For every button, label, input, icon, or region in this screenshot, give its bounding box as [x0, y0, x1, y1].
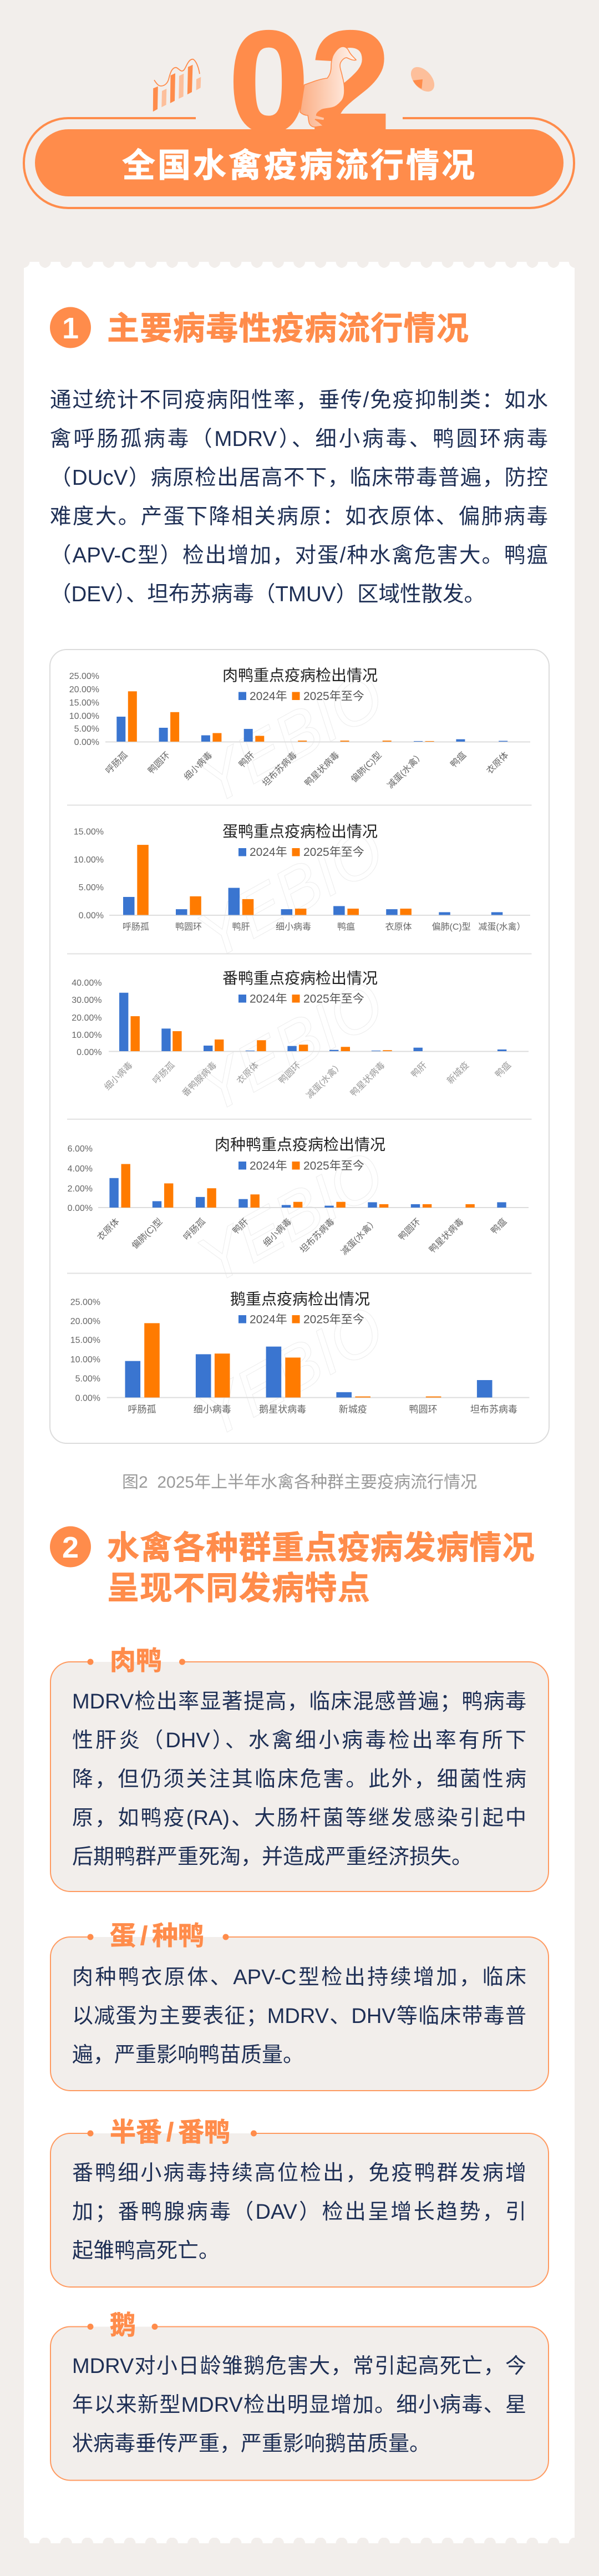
- y axis labels: 25.00%: [69, 672, 99, 681]
- x axis labels: 鸭肝: [231, 1216, 251, 1236]
- x axis labels: 呼肠孤: [128, 1404, 156, 1414]
- text block: section 1 body: （DEV）、坦布苏病毒（TMUV）区域性散发。: [50, 582, 485, 606]
- text block: meat duck: 性肝炎（DHV）、水禽细小病毒检出率有所下: [72, 1729, 526, 1752]
- text block: goose: MDRV对小日龄雏鹅危害大，常引起高死亡，今: [72, 2355, 526, 2378]
- x axis labels: 鸭圆环: [146, 750, 172, 776]
- legend: [238, 690, 364, 703]
- x axis labels: 衣原体: [485, 750, 511, 776]
- card frame: semi-muscovy and muscovy duck: [50, 2130, 549, 2287]
- y axis labels: 15.00%: [74, 828, 104, 836]
- legend: 2024年: [250, 993, 287, 1005]
- x axis labels: 鸭圆环: [277, 1060, 303, 1086]
- y axis labels: [72, 978, 102, 1057]
- x axis labels: 呼肠孤: [104, 750, 130, 776]
- y axis labels: 4.00%: [68, 1164, 93, 1174]
- x axis labels: 减蛋(水禽）: [339, 1216, 379, 1257]
- card frame: layer and breeder duck: [50, 1934, 549, 2091]
- y axis labels: 0.00%: [75, 1393, 100, 1403]
- y axis labels: 10.00%: [72, 1031, 102, 1040]
- x axis labels: 偏肺(C)型: [432, 922, 471, 932]
- chart: layer duck: [74, 813, 530, 973]
- section badge 2: [50, 1527, 91, 1568]
- text block: layer and breeder duck: 肉种鸭衣原体、APV-C型检出持续增加，临床: [72, 1966, 526, 1989]
- x axis labels: 呼肠孤: [181, 1216, 207, 1243]
- text block: semi-muscovy and muscovy duck: [72, 2162, 526, 2263]
- x axis labels: 细小病毒: [194, 1404, 231, 1414]
- y axis labels: 25.00%: [70, 1298, 100, 1307]
- legend: [238, 993, 364, 1005]
- x axis labels: 鸭圆环: [397, 1216, 423, 1243]
- figure caption: 图2 2025年上半年水禽各种群主要疫病流行情况: [122, 1473, 477, 1492]
- text block: semi-muscovy and muscovy duck: 番鸭细小病毒持续高位检出，免疫鸭群发病增: [72, 2162, 526, 2185]
- legend: 2025年至今: [303, 1314, 364, 1326]
- chart: breeder meat duck: YEBIO: [185, 1137, 395, 1298]
- bars: [116, 691, 507, 742]
- x axis labels: [123, 922, 526, 932]
- text block: goose: 年以来新型MDRV检出明显增加。细小病毒、星: [72, 2394, 526, 2417]
- text block: section 1 body: （DUcV）病原检出居高不下，临床带毒普遍，防控: [50, 466, 548, 490]
- heading: section 1: 主要病毒性疫病流行情况: [107, 311, 469, 347]
- icon: pie ellipse: [407, 63, 439, 96]
- x axis labels: 坦布苏病毒: [298, 1216, 337, 1255]
- legend: 2025年至今: [303, 690, 364, 703]
- text block: goose: [72, 2355, 526, 2456]
- x axis labels: [104, 750, 511, 790]
- x axis labels: [128, 1404, 517, 1414]
- chart: meat duck: YEBIO: [185, 658, 395, 819]
- section badge 1: [50, 307, 91, 348]
- x axis labels: 衣原体: [235, 1060, 261, 1086]
- legend: [238, 846, 364, 859]
- legend: 2024年: [250, 690, 287, 703]
- chart title: 肉种鸭重点疫病检出情况: [215, 1136, 385, 1153]
- x axis labels: 减蛋(水禽）: [385, 750, 426, 790]
- y axis labels: 5.00%: [74, 724, 99, 734]
- card frame: goose: [50, 2324, 549, 2481]
- x axis labels: 偏肺(C)型: [349, 750, 384, 784]
- y axis labels: 10.00%: [70, 1355, 100, 1365]
- y axis labels: 30.00%: [72, 996, 102, 1005]
- x axis labels: 减蛋(水禽）: [304, 1060, 345, 1101]
- y axis labels: 20.00%: [70, 1317, 100, 1326]
- chart: breeder meat duck: [68, 1136, 529, 1298]
- y axis labels: 15.00%: [70, 1336, 100, 1345]
- title banner: 全国水禽疫病流行情况: [122, 147, 477, 184]
- x axis labels: 鸭瘟: [494, 1060, 513, 1079]
- text block: layer and breeder duck: 以减蛋为主要表征；MDRV、DHV等临床带毒普: [72, 2005, 526, 2028]
- text block: semi-muscovy and muscovy duck: 起雏鸭高死亡。: [72, 2239, 220, 2263]
- bars: [123, 845, 502, 915]
- x axis labels: 细小病毒: [103, 1060, 135, 1092]
- x axis labels: 减蛋(水禽）: [478, 922, 526, 932]
- icon: goose: [300, 47, 356, 127]
- text block: goose: 状病毒垂传严重，严重影响鹅苗质量。: [72, 2432, 430, 2456]
- label: goose: 鹅: [110, 2310, 136, 2340]
- legend: 2024年: [250, 846, 287, 859]
- x axis labels: 鸭星状病毒: [427, 1216, 466, 1255]
- legend: 2024年: [250, 1314, 287, 1326]
- y axis labels: 0.00%: [68, 1204, 93, 1213]
- x axis labels: 衣原体: [385, 922, 412, 932]
- y axis labels: [74, 828, 104, 921]
- text block: meat duck: MDRV检出率显著提高，临床混感普遍；鸭病毒: [72, 1690, 526, 1713]
- text block: meat duck: [72, 1690, 526, 1869]
- title banner: [24, 118, 574, 208]
- chart: layer duck: YEBIO: [185, 813, 395, 973]
- y axis labels: 20.00%: [72, 1013, 102, 1023]
- x axis labels: 鸭瘟: [337, 922, 355, 932]
- legend: [238, 1314, 364, 1326]
- x axis labels: 呼肠孤: [123, 922, 149, 932]
- x axis labels: [95, 1216, 509, 1257]
- x axis labels: 鸭肝: [409, 1060, 429, 1079]
- y axis labels: 10.00%: [69, 712, 99, 721]
- y axis labels: 40.00%: [72, 978, 102, 988]
- text block: section 1 body: （APV-C型）检出增加，对蛋/种水禽危害大。鸭瘟: [50, 544, 548, 567]
- x axis labels: 新城疫: [445, 1060, 471, 1086]
- chart: muscovy duck: [72, 966, 529, 1127]
- label: meat duck: 肉鸭: [110, 1646, 162, 1675]
- chart: meat duck: [69, 658, 530, 819]
- chart: muscovy duck: YEBIO: [185, 966, 395, 1127]
- legend: 2025年至今: [303, 846, 364, 859]
- x axis labels: 偏肺(C)型: [130, 1216, 164, 1251]
- y axis labels: [70, 1298, 100, 1403]
- x axis labels: 鸭肝: [232, 922, 250, 932]
- x axis labels: 坦布苏病毒: [261, 750, 299, 788]
- x axis labels: 鸭圆环: [175, 922, 202, 932]
- panel: chart frame: [50, 650, 549, 1443]
- text block: meat duck: 原，如鸭疫(RA)、大肠杆菌等继发感染引起中: [72, 1807, 526, 1830]
- heading: section 2: [107, 1530, 535, 1606]
- text block: layer and breeder duck: [72, 1966, 526, 2067]
- legend: 2025年至今: [303, 993, 364, 1005]
- heading: section 2: 水禽各种群重点疫病发病情况: [107, 1530, 535, 1566]
- label: semi-muscovy and muscovy duck: 半番/番鸭: [110, 2117, 230, 2147]
- y axis labels: 0.00%: [77, 1048, 102, 1057]
- card frame: meat duck: [50, 1659, 549, 1892]
- x axis labels: 呼肠孤: [151, 1060, 177, 1086]
- x axis labels: 鸭圆环: [409, 1404, 437, 1414]
- y axis labels: 5.00%: [75, 1375, 100, 1383]
- x axis labels: 鹅星状病毒: [259, 1404, 306, 1414]
- x axis labels: 衣原体: [95, 1216, 121, 1243]
- x axis labels: 细小病毒: [276, 922, 311, 932]
- chart: goose: YEBIO: [185, 1291, 395, 1452]
- bars: [125, 1323, 493, 1397]
- y axis labels: [68, 1144, 93, 1213]
- label: layer and breeder duck: 蛋/种鸭: [110, 1921, 204, 1950]
- bars: [109, 1164, 506, 1208]
- y axis labels: 20.00%: [69, 685, 99, 694]
- x axis labels: 细小病毒: [182, 750, 214, 782]
- text block: meat duck: 降，但仍须关注其临床危害。此外，细菌性病: [72, 1768, 526, 1791]
- y axis labels: 6.00%: [68, 1144, 93, 1154]
- legend: [238, 1159, 364, 1173]
- section badge 1: 1: [62, 312, 79, 345]
- x axis labels: 细小病毒: [261, 1216, 293, 1249]
- x axis labels: 番鸭腺病毒: [180, 1060, 219, 1098]
- y axis labels: 10.00%: [74, 855, 104, 865]
- text block: meat duck: 后期鸭群严重死淘，并造成严重经济损失。: [72, 1845, 473, 1869]
- x axis labels: 鸭星状病毒: [303, 750, 341, 788]
- text block: section 1 body: 难度大。产蛋下降相关病原：如衣原体、偏肺病毒: [50, 505, 548, 529]
- chart title: 蛋鸭重点疫病检出情况: [222, 823, 378, 840]
- x axis labels: 新城疫: [339, 1404, 367, 1414]
- legend: 2025年至今: [303, 1159, 364, 1173]
- y axis labels: 5.00%: [79, 883, 104, 893]
- legend: 2024年: [250, 1159, 287, 1173]
- chart title: 鹅重点疫病检出情况: [230, 1290, 370, 1308]
- chart: goose: [70, 1290, 529, 1452]
- y axis labels: 0.00%: [79, 911, 104, 921]
- text block: section 1 body: [50, 388, 548, 606]
- x axis labels: 鸭瘟: [489, 1216, 509, 1236]
- text block: layer and breeder duck: 遍，严重影响鸭苗质量。: [72, 2043, 304, 2067]
- text block: section 1 body: 禽呼肠孤病毒（MDRV）、细小病毒、鸭圆环病毒: [50, 427, 548, 451]
- x axis labels: [103, 1060, 513, 1101]
- text block: semi-muscovy and muscovy duck: 加；番鸭腺病毒（DAV）检出呈增长趋势，引: [72, 2200, 526, 2224]
- y axis labels: [69, 672, 99, 747]
- y axis labels: 0.00%: [74, 738, 99, 747]
- bars: [119, 993, 506, 1051]
- x axis labels: 坦布苏病毒: [470, 1404, 517, 1414]
- y axis labels: 15.00%: [69, 698, 99, 708]
- chart title: 肉鸭重点疫病检出情况: [222, 667, 378, 684]
- y axis labels: 2.00%: [68, 1184, 93, 1194]
- x axis labels: 鸭肝: [237, 750, 257, 769]
- big number 2: 2: [311, 1, 390, 161]
- big number 0: 0: [229, 1, 308, 161]
- x axis labels: 鸭瘟: [449, 750, 468, 769]
- chart title: 番鸭重点疫病检出情况: [222, 970, 378, 987]
- text block: section 1 body: 通过统计不同疫病阳性率，垂传/免疫抑制类：如水: [50, 388, 548, 412]
- x axis labels: 鸭星状病毒: [348, 1060, 387, 1098]
- heading: section 2: 呈现不同发病特点: [107, 1570, 370, 1606]
- section badge 2: 2: [62, 1531, 79, 1564]
- icon: mini bar chart with trend line: [153, 59, 201, 111]
